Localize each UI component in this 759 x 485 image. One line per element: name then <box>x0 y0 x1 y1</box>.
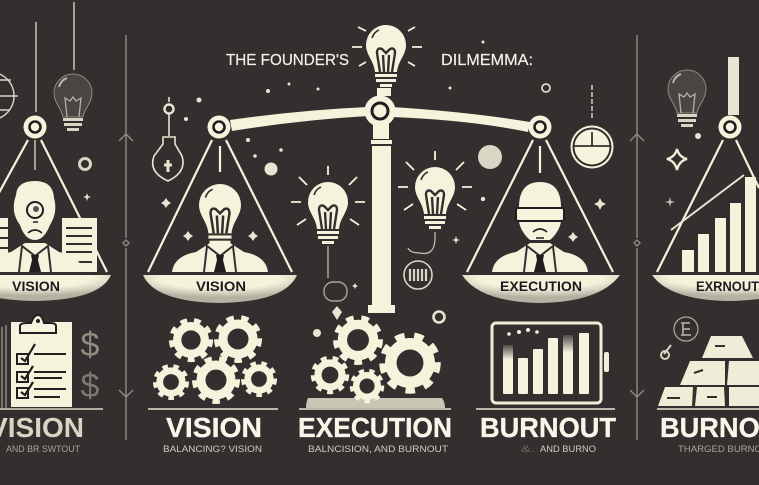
subtitle: &. <box>521 444 535 454</box>
figure: bulb-head founder <box>172 184 268 272</box>
dot <box>695 133 701 139</box>
icon: globe <box>0 72 18 120</box>
outline sparkle <box>667 149 687 170</box>
small ring <box>542 84 550 92</box>
icon: clock <box>570 85 614 168</box>
icon: center-left bulb <box>308 182 348 244</box>
icon: dim bulb <box>54 74 92 131</box>
baseline <box>148 408 278 410</box>
small star <box>665 197 675 207</box>
icon: battery frame <box>492 323 601 403</box>
icon: gold bars <box>658 336 759 406</box>
top bulb rays <box>352 27 422 66</box>
left hanging lines <box>35 2 74 170</box>
scale center pivot <box>364 96 396 126</box>
panel dividers <box>119 35 644 440</box>
panel: left cropped scale <box>0 2 111 454</box>
gear base <box>306 398 445 408</box>
icon: center-right bulb <box>415 167 455 229</box>
subtitle: BALNCISION, AND BURNOUT <box>308 444 449 454</box>
icon: shaded ball <box>478 145 502 169</box>
icon: dollar signs <box>81 326 100 405</box>
left pan <box>0 275 111 301</box>
left small star <box>83 193 91 201</box>
title: THE FOUNDER'S <box>226 52 349 69</box>
icon: dollar signs: $ <box>81 326 100 364</box>
panel: main balance scale <box>143 25 620 337</box>
panel: vision gears <box>148 318 278 454</box>
icon: top bulb <box>366 25 406 87</box>
ring near burnout <box>434 312 444 322</box>
icon: striped dial <box>404 261 432 289</box>
icon: dim bulb <box>668 70 706 127</box>
icon: clipboard checklist <box>2 315 72 408</box>
key ring <box>661 351 669 359</box>
right pan strings <box>467 140 613 272</box>
left pan label: VISION <box>12 279 60 294</box>
rising trend line <box>671 175 744 230</box>
figure: one-eyed founder <box>0 181 83 272</box>
scale beam <box>230 107 530 132</box>
battery nub <box>604 352 609 372</box>
center-right bulb rays <box>398 151 472 210</box>
gear cluster <box>156 318 274 400</box>
decorative sparkles <box>161 40 606 337</box>
heading: BURNOUT <box>480 412 616 443</box>
icon: outlined badge <box>674 317 698 341</box>
left ring <box>80 158 90 170</box>
right scale strings <box>657 140 759 272</box>
title: DILMEMMA: <box>441 52 533 69</box>
subtitle: AND BURNO <box>540 444 596 454</box>
scale pillar <box>368 88 395 313</box>
right pan pivot <box>528 116 552 138</box>
left pan strings <box>148 140 292 272</box>
subtitle: THARGED BURNO <box>678 444 759 454</box>
panel: burnout chart <box>476 323 616 454</box>
right pan <box>652 275 759 301</box>
left pan pivot <box>208 116 230 138</box>
gear cluster <box>314 319 436 401</box>
left subtitle: AND BR SWTOUT <box>6 444 80 454</box>
center-left bulb rays <box>291 166 365 225</box>
heading: EXECUTION <box>298 412 452 443</box>
baseline <box>476 408 615 410</box>
baseline <box>657 408 759 410</box>
panel: execution gears <box>298 319 452 454</box>
pan label: vision: VISION <box>196 279 246 294</box>
battery bar chart <box>503 328 589 394</box>
small pill icon <box>324 282 347 301</box>
thin wire <box>328 232 435 278</box>
left documents <box>0 218 97 272</box>
vertical bar <box>728 57 739 115</box>
icon: dollar signs: $ <box>81 367 100 405</box>
left scale pan <box>143 275 297 303</box>
panel: right cropped scale <box>652 57 759 454</box>
right pivot <box>718 116 742 138</box>
bar chart <box>682 177 756 272</box>
pan label: execution: EXECUTION <box>500 279 582 294</box>
title <box>226 52 533 69</box>
icon: small key <box>664 345 671 354</box>
left scale strings <box>0 140 107 272</box>
heading: VISION <box>166 412 262 443</box>
left baseline <box>0 408 103 410</box>
figure: blindfolded founder <box>492 182 588 272</box>
icon: hanging outline bulb <box>153 97 183 181</box>
left pivot <box>24 116 46 138</box>
subtitle: BALANCING? VISION <box>163 444 262 454</box>
baseline <box>299 408 451 410</box>
right scale pan <box>462 275 620 303</box>
